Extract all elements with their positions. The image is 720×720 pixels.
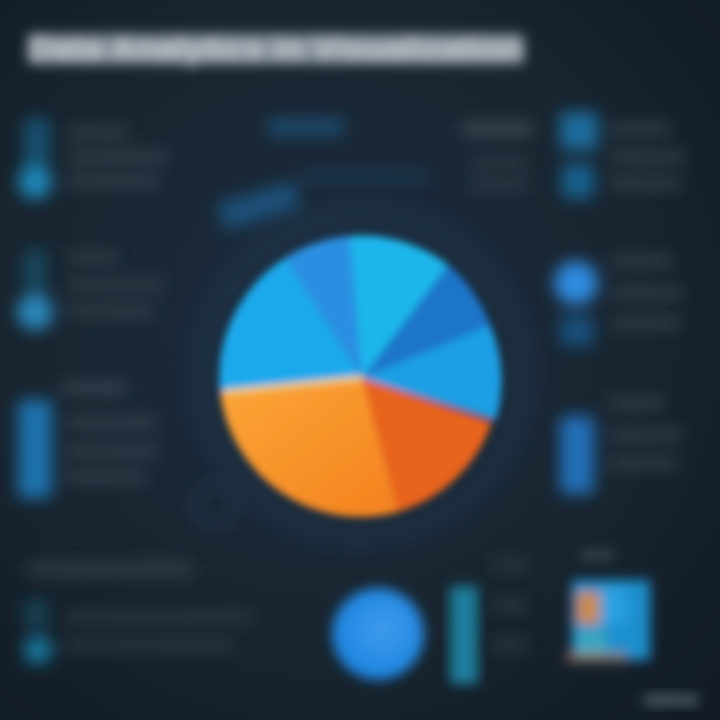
icon: left lower bar <box>18 400 52 498</box>
text block: left middle <box>68 252 163 316</box>
panel: left column lower <box>18 382 156 498</box>
small ring icon <box>195 485 235 525</box>
slice: highlight line <box>224 378 362 392</box>
pie chart <box>219 236 501 517</box>
top centre labels <box>217 118 532 230</box>
slice: right blue <box>362 325 501 420</box>
panel: left column top <box>18 118 168 199</box>
icon: right middle <box>554 261 598 305</box>
text block: bottom left <box>64 612 254 650</box>
icon: right lower bar <box>560 416 594 494</box>
icon: left middle <box>24 250 46 290</box>
icon: left top <box>24 118 50 164</box>
slice: top cyan <box>350 236 448 378</box>
text block: left top <box>68 128 168 186</box>
panel: right column top <box>560 112 685 198</box>
bottom right chart <box>566 550 650 662</box>
title: Data Analytics in Visualization <box>28 30 523 68</box>
slice: red orange <box>362 378 492 512</box>
text block: right middle <box>612 256 682 328</box>
bottom text block <box>492 560 528 650</box>
bottom vertical bar <box>450 586 478 684</box>
footer mark <box>644 694 698 706</box>
text block: left lower <box>62 382 156 482</box>
text block: right lower <box>608 398 682 468</box>
icon: bottom left <box>24 600 48 628</box>
slice: left blue <box>219 258 362 392</box>
bottom circle chart <box>332 588 424 680</box>
slice: dark blue <box>362 265 490 378</box>
chart glow ring <box>167 177 557 567</box>
panel: right column lower <box>560 398 682 494</box>
panel: bottom left <box>24 562 254 664</box>
panel: left column middle <box>17 250 163 330</box>
text block: right top <box>610 124 685 188</box>
icon: right top <box>560 112 598 150</box>
panel: right column middle <box>554 256 682 346</box>
heading: bottom left <box>28 562 193 576</box>
slice: orange <box>220 378 398 517</box>
slice: mid blue <box>285 236 362 378</box>
